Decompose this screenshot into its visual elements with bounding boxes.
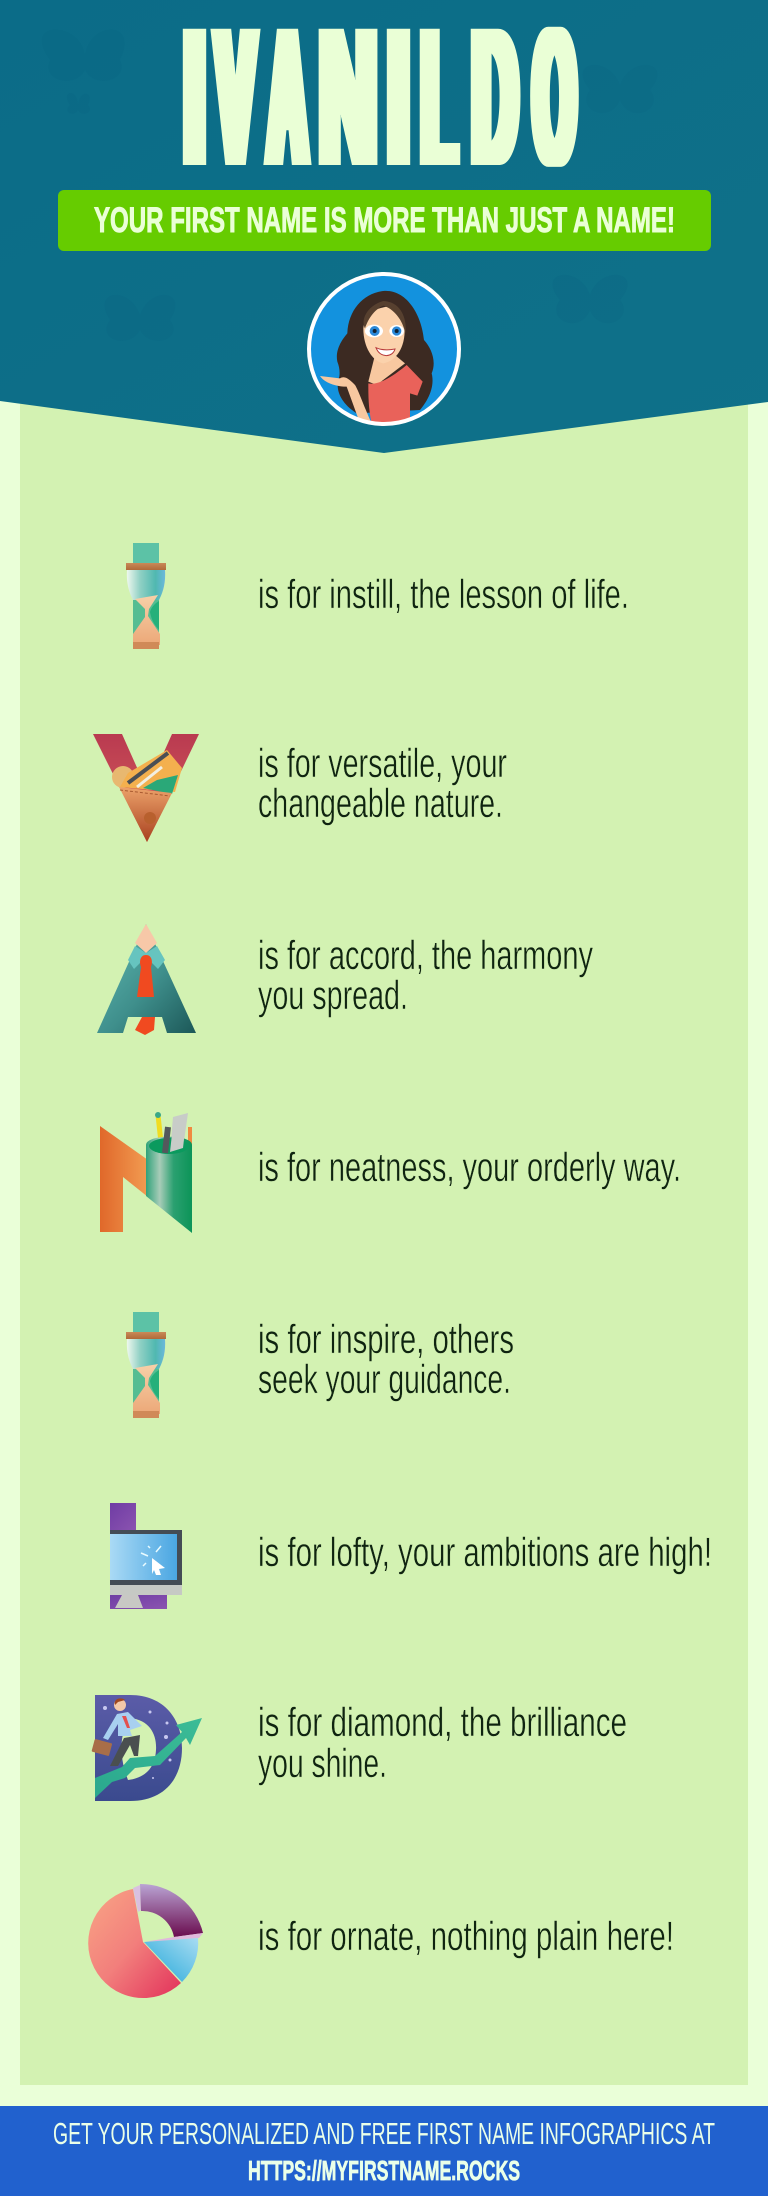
- text: V: is for versatile, your: [258, 740, 507, 786]
- header: teal chevron banner: [0, 0, 768, 453]
- icon: letter O pie chart: [88, 1884, 203, 1998]
- subtitle banner: [58, 190, 711, 251]
- text: V: changeable nature.: [258, 780, 503, 826]
- panel: content area: [20, 395, 748, 2085]
- text: I: is for instill, the lesson of life.: [258, 571, 629, 617]
- text: A: is for accord, the harmony: [258, 932, 593, 978]
- icon: letter N pencil cup: [100, 1112, 192, 1233]
- text: D: is for diamond, the brilliance: [258, 1699, 627, 1745]
- text: A: you spread.: [258, 972, 408, 1018]
- text: I second: seek your guidance.: [258, 1356, 511, 1402]
- avatar: cartoon woman in circle: [309, 274, 459, 424]
- icon: letter A suit and tie: [97, 924, 196, 1035]
- icon: letter I hourglass: [126, 1312, 166, 1418]
- text: D: you shine.: [258, 1740, 387, 1786]
- icon: letter I hourglass: [126, 543, 166, 649]
- icon: letter L computer monitor: [110, 1503, 182, 1609]
- footer bar: [0, 2106, 768, 2196]
- footer text line 2: HTTPS://MYFIRSTNAME.ROCKS: [248, 2155, 520, 2186]
- title: [184, 0, 575, 207]
- text: I second: is for inspire, others: [258, 1316, 514, 1362]
- icon: letter D businessman climbing arrow: [91, 1695, 202, 1801]
- icon: letter V wallet: [93, 734, 199, 842]
